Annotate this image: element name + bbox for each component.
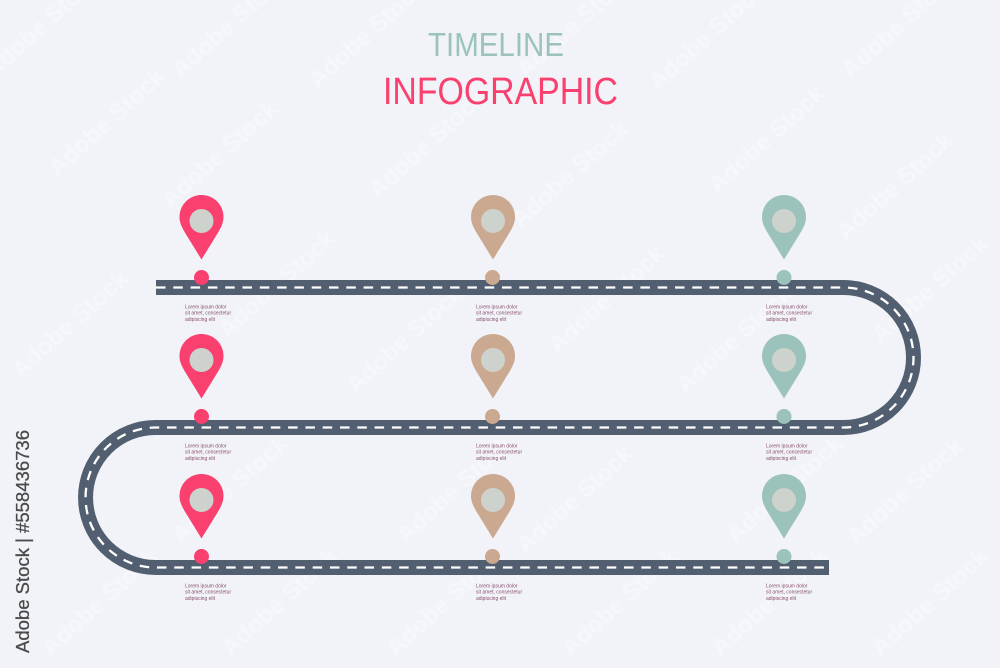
dot: pink row 1 — [194, 270, 209, 285]
text: Adobe Stock — [156, 95, 284, 214]
text: Adobe Stock — [43, 63, 171, 182]
text: Adobe Stock — [556, 543, 684, 662]
text: Adobe Stock — [363, 85, 491, 204]
text: row 1 col 3: Lorem ipsum dolor — [766, 304, 807, 310]
text: row 3 col 2: adipiscing elit — [476, 596, 507, 602]
text: Adobe Stock — [506, 115, 634, 234]
row 3 markers — [180, 474, 806, 564]
text: row 2 col 2: adipiscing elit — [476, 456, 507, 462]
dot: pink row 3 — [194, 549, 209, 564]
text: row 1 col 1: adipiscing elit — [185, 317, 216, 323]
pin: pink row 3 — [180, 474, 224, 538]
text: row 1 col 1: sit amet, consectetur — [185, 311, 231, 317]
pin: tan row 3 — [471, 474, 515, 538]
text: row 3 col 1: adipiscing elit — [185, 596, 216, 602]
text blocks — [185, 304, 812, 602]
text: Adobe Stock — [381, 543, 509, 662]
dot: pink row 2 — [194, 409, 209, 424]
pin: pink row 2 — [180, 334, 224, 398]
text: Adobe Stock — [703, 80, 831, 199]
text: row 2 col 1: Lorem ipsum dolor — [185, 444, 226, 450]
text: Adobe Stock — [831, 127, 959, 246]
text: row 3 col 3: Lorem ipsum dolor — [766, 584, 807, 590]
text: Adobe Stock — [706, 543, 834, 662]
pin: teal row 1 — [762, 195, 806, 260]
text: Adobe Stock — [216, 543, 344, 662]
title: infographic: INFOGRAPHIC — [383, 71, 618, 113]
text: row 3 col 1: Lorem ipsum dolor — [185, 584, 226, 590]
dot: tan row 3 — [485, 549, 500, 564]
dot: tan row 2 — [485, 409, 500, 424]
text: row 2 col 1: sit amet, consectetur — [185, 450, 231, 456]
text: Adobe Stock — [213, 225, 341, 344]
pin: tan row 2 — [471, 334, 515, 398]
text: Adobe Stock — [391, 430, 519, 549]
text: row 1 col 3: adipiscing elit — [766, 317, 797, 323]
text: row 3 col 3: sit amet, consectetur — [766, 590, 812, 596]
text: Adobe Stock — [866, 230, 994, 349]
row 2 markers — [180, 334, 806, 424]
road — [86, 288, 913, 568]
text: Adobe Stock — [36, 543, 164, 662]
text: row 3 col 3: adipiscing elit — [766, 596, 797, 602]
pin: teal row 3 — [762, 474, 806, 538]
text: Adobe Stock — [341, 280, 469, 399]
text: Adobe Stock — [866, 543, 994, 662]
text: row 2 col 2: Lorem ipsum dolor — [476, 444, 517, 450]
dot: teal row 1 — [776, 270, 792, 285]
text: row 3 col 2: sit amet, consectetur — [476, 590, 522, 596]
text: row 1 col 2: adipiscing elit — [476, 317, 507, 323]
text: Adobe Stock — [6, 265, 134, 384]
pin: pink row 1 — [180, 195, 224, 260]
dot: teal row 2 — [776, 409, 792, 424]
dot: teal row 3 — [776, 549, 792, 564]
text: row 2 col 3: Lorem ipsum dolor — [766, 444, 807, 450]
text: Adobe Stock — [841, 432, 969, 551]
row 1 markers — [180, 195, 806, 285]
text: row 3 col 1: sit amet, consectetur — [185, 590, 231, 596]
dot: tan row 1 — [485, 270, 500, 285]
text: row 2 col 1: adipiscing elit — [185, 456, 216, 462]
text: Adobe Stock — [166, 430, 294, 549]
pin: tan row 1 — [471, 195, 515, 260]
text: Adobe Stock — [671, 280, 799, 399]
text: Adobe Stock — [721, 430, 849, 549]
text: row 1 col 2: sit amet, consectetur — [476, 311, 522, 317]
stock id label: Adobe Stock | #558436736 — [13, 430, 33, 653]
text: Adobe Stock — [511, 440, 639, 559]
text: row 1 col 3: sit amet, consectetur — [766, 311, 812, 317]
text: row 1 col 2: Lorem ipsum dolor — [476, 304, 517, 310]
text: row 2 col 3: adipiscing elit — [766, 456, 797, 462]
text: row 1 col 1: Lorem ipsum dolor — [185, 304, 226, 310]
text: row 2 col 2: sit amet, consectetur — [476, 450, 522, 456]
pin: teal row 2 — [762, 334, 806, 398]
text: row 2 col 3: sit amet, consectetur — [766, 450, 812, 456]
text: row 3 col 2: Lorem ipsum dolor — [476, 584, 517, 590]
title: timeline: TIMELINE — [428, 26, 564, 63]
text: Adobe Stock — [543, 240, 671, 359]
